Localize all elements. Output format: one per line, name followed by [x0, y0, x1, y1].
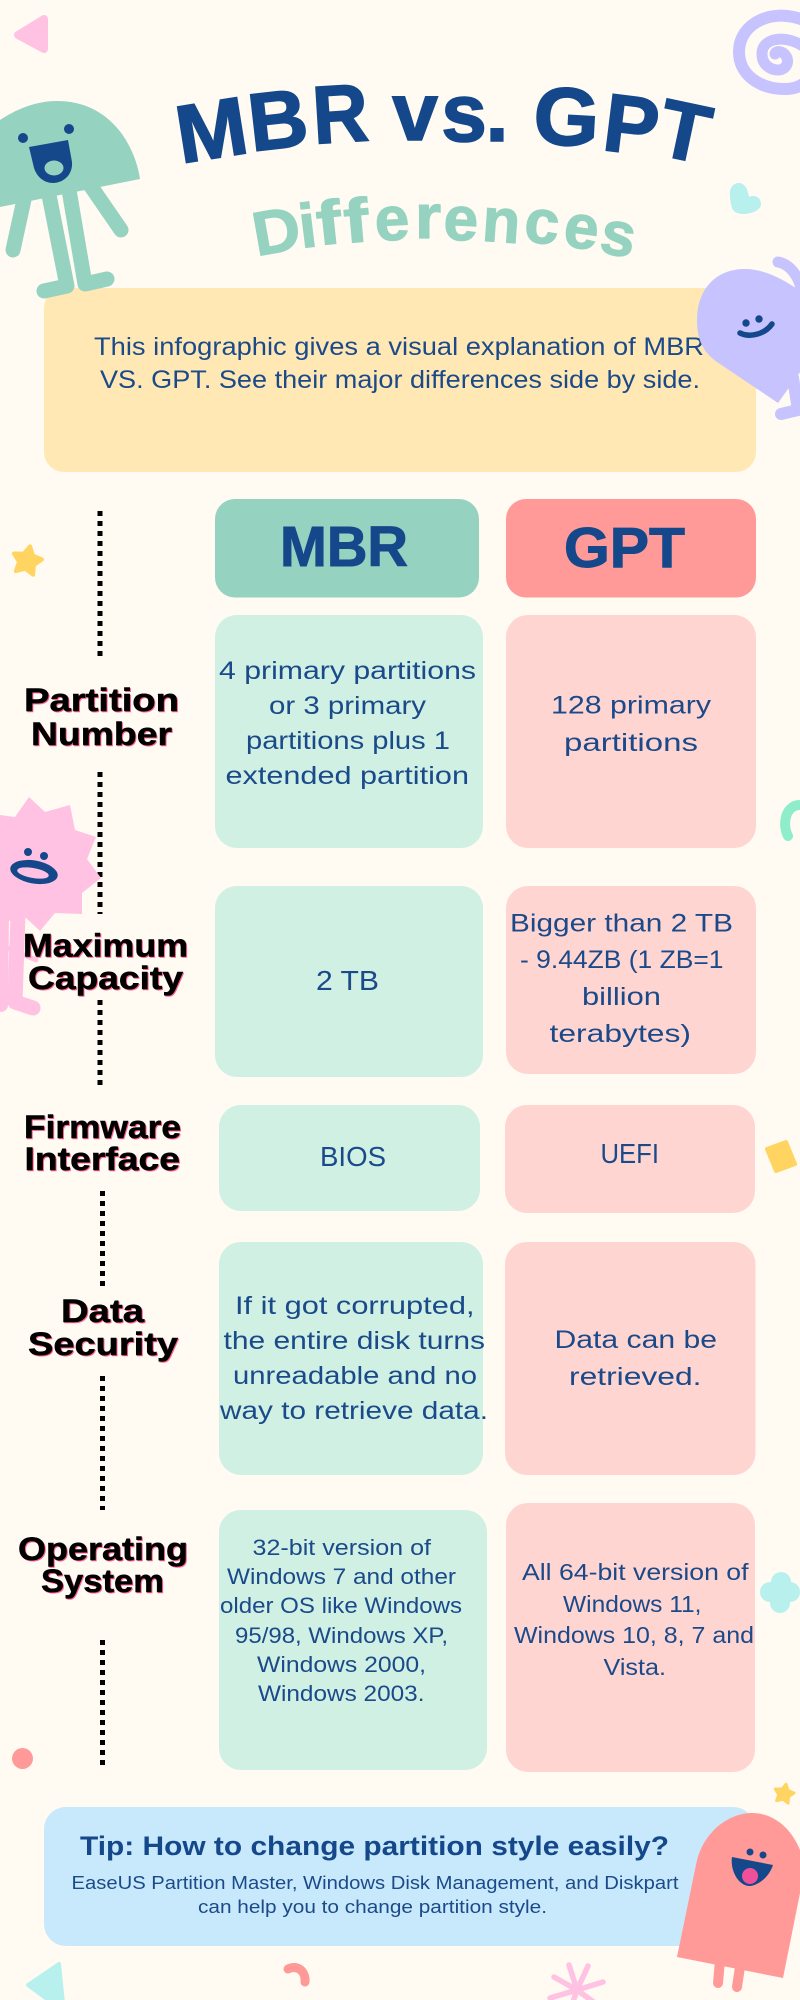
icon: pink asterisk	[550, 1965, 603, 2000]
icon: yellow square	[767, 1142, 795, 1171]
icon: small yellow star	[773, 1782, 796, 1804]
MBR cell: operating system: 95/98, Windows XP,	[235, 1623, 448, 1648]
dotted timeline: segment 2	[98, 772, 102, 914]
GPT cell: data security: Data can be	[554, 1326, 717, 1354]
MBR cell: data security: the entire disk turns	[224, 1327, 485, 1355]
intro text: VS. GPT. See their major differences side by side.	[100, 366, 700, 394]
row label: Maximum Capacity: Maximum	[23, 928, 188, 964]
GPT cell: operating system: Vista.	[604, 1654, 666, 1680]
subtitle: Differences: e	[560, 191, 604, 264]
icon: red arc	[288, 1967, 305, 1982]
row label: Partition Number: Partition	[24, 682, 179, 718]
subtitle: Differences: D	[247, 192, 306, 270]
icon: small teal heart	[730, 183, 761, 214]
GPT cell: capacity: Bigger than 2 TB	[510, 910, 733, 938]
GPT cell: firmware	[505, 1105, 755, 1213]
GPT cell: data security	[505, 1242, 756, 1475]
GPT cell: capacity: terabytes)	[550, 1020, 691, 1048]
MBR cell: partition number: extended partition	[226, 762, 469, 790]
subtitle: Differences: c	[521, 186, 563, 259]
MBR cell: capacity	[215, 886, 483, 1077]
subtitle: Differences: s	[596, 198, 642, 272]
GPT cell: operating system	[506, 1503, 755, 1772]
row label: Maximum Capacity	[23, 928, 188, 996]
character: pink spiky creature	[0, 797, 101, 1008]
row label: Data Security: Data	[61, 1293, 144, 1329]
icon: teal arc	[785, 805, 800, 836]
intro text	[94, 333, 704, 394]
dotted timeline: segment 5	[100, 1376, 105, 1510]
row label: Data Security	[28, 1293, 178, 1362]
subtitle: Differences: r	[415, 182, 441, 251]
GPT cell: firmware: UEFI	[600, 1138, 659, 1169]
MBR cell: partition number: partitions plus 1	[246, 727, 450, 755]
title: MBR vs. GPT	[169, 66, 719, 182]
dotted timeline: segment 3	[98, 1000, 102, 1085]
title: MBR vs. GPT: G	[531, 69, 602, 164]
GPT cell: partition number: partitions	[564, 729, 698, 757]
panel: tip	[44, 1807, 755, 1946]
column header: MBR: MBR	[280, 515, 408, 579]
subtitle: Differences: n	[480, 186, 523, 257]
title: MBR vs. GPT: T	[651, 82, 719, 182]
icon: teal flower	[760, 1572, 800, 1613]
intro text: This infographic gives a visual explanation of MBR	[94, 333, 704, 361]
MBR cell: firmware	[219, 1105, 480, 1211]
row label: Data Security: Security	[28, 1326, 178, 1362]
character: red popsicle	[677, 1813, 800, 1987]
MBR cell: operating system: 32-bit version of	[252, 1535, 432, 1560]
MBR cell: firmware: BIOS	[320, 1141, 386, 1172]
column header: GPT: GPT	[564, 516, 685, 580]
GPT cell: capacity: - 9.44ZB (1 ZB=1	[520, 946, 724, 974]
GPT cell: partition number	[506, 615, 756, 848]
GPT cell: operating system: Windows 11,	[563, 1591, 702, 1617]
tip body: EaseUS Partition Master, Windows Disk Management, and Diskpart	[72, 1873, 678, 1893]
column header: GPT	[506, 499, 756, 598]
GPT cell: partition number: 128 primary	[551, 692, 712, 720]
MBR cell: data security: unreadable and no	[233, 1362, 477, 1390]
title: MBR vs. GPT: v	[392, 67, 438, 158]
title: MBR vs. GPT: P	[599, 77, 664, 174]
dotted timeline: segment 1	[98, 511, 102, 657]
MBR cell: operating system: Windows 7 and other	[227, 1564, 456, 1589]
tip body	[72, 1873, 678, 1917]
tip heading: Tip: How to change partition style easily?	[80, 1831, 669, 1861]
icon: red dot	[12, 1748, 33, 1769]
subtitle: Differences: f	[313, 187, 345, 259]
row label: Maximum Capacity: Capacity	[28, 960, 183, 996]
title: MBR vs. GPT: .	[486, 68, 508, 159]
row label: Partition Number	[24, 682, 179, 752]
MBR cell: operating system: Windows 2000,	[257, 1652, 426, 1677]
row label: Firmware Interface	[24, 1109, 181, 1177]
icon: pink triangle	[18, 19, 44, 49]
MBR cell: partition number	[215, 615, 483, 848]
character: teal jellyfish	[0, 101, 140, 291]
column header: MBR	[215, 499, 479, 598]
GPT cell: capacity	[506, 886, 756, 1074]
MBR cell: data security: If it got corrupted,	[235, 1292, 474, 1320]
MBR cell: partition number: 4 primary partitions	[219, 657, 476, 685]
MBR cell: operating system: older OS like Windows	[220, 1593, 462, 1618]
GPT cell: data security: retrieved.	[569, 1363, 702, 1391]
icon: yellow star	[10, 543, 44, 576]
title: MBR vs. GPT: B	[243, 72, 312, 169]
subtitle: Differences: i	[295, 191, 320, 262]
MBR cell: operating system	[219, 1510, 487, 1770]
GPT cell: operating system: All 64-bit version of	[522, 1559, 749, 1585]
MBR cell: data security: way to retrieve data.	[219, 1397, 488, 1425]
row label: Firmware Interface: Interface	[24, 1141, 180, 1177]
MBR cell: partition number: or 3 primary	[269, 692, 427, 720]
subtitle: Differences: e	[373, 184, 411, 255]
MBR cell: capacity: 2 TB	[316, 965, 379, 996]
icon: bottom teal triangle	[28, 1964, 63, 2000]
title: MBR vs. GPT: M	[169, 79, 254, 181]
MBR cell: operating system: Windows 2003.	[258, 1681, 424, 1706]
subtitle: Differences: e	[442, 184, 480, 255]
character: purple heart	[697, 262, 800, 414]
panel: intro	[44, 288, 756, 472]
row label: Operating System	[18, 1531, 188, 1599]
MBR cell: data security	[219, 1242, 488, 1475]
subtitle: Differences	[247, 182, 642, 272]
dotted timeline: segment 6	[100, 1640, 105, 1765]
GPT cell: capacity: billion	[582, 983, 661, 1011]
row label: Firmware Interface: Firmware	[24, 1109, 181, 1145]
tip body: can help you to change partition style.	[198, 1897, 547, 1917]
title: MBR vs. GPT: R	[310, 66, 371, 161]
subtitle: Differences: f	[341, 185, 372, 257]
row label: Partition Number: Number	[31, 716, 172, 752]
dotted timeline: segment 4	[100, 1191, 105, 1291]
row label: Operating System: System	[41, 1563, 164, 1599]
row label: Operating System: Operating	[18, 1531, 188, 1567]
icon: purple spiral	[739, 16, 800, 89]
GPT cell: operating system: Windows 10, 8, 7 and	[514, 1622, 754, 1648]
title: MBR vs. GPT: s	[441, 68, 487, 159]
